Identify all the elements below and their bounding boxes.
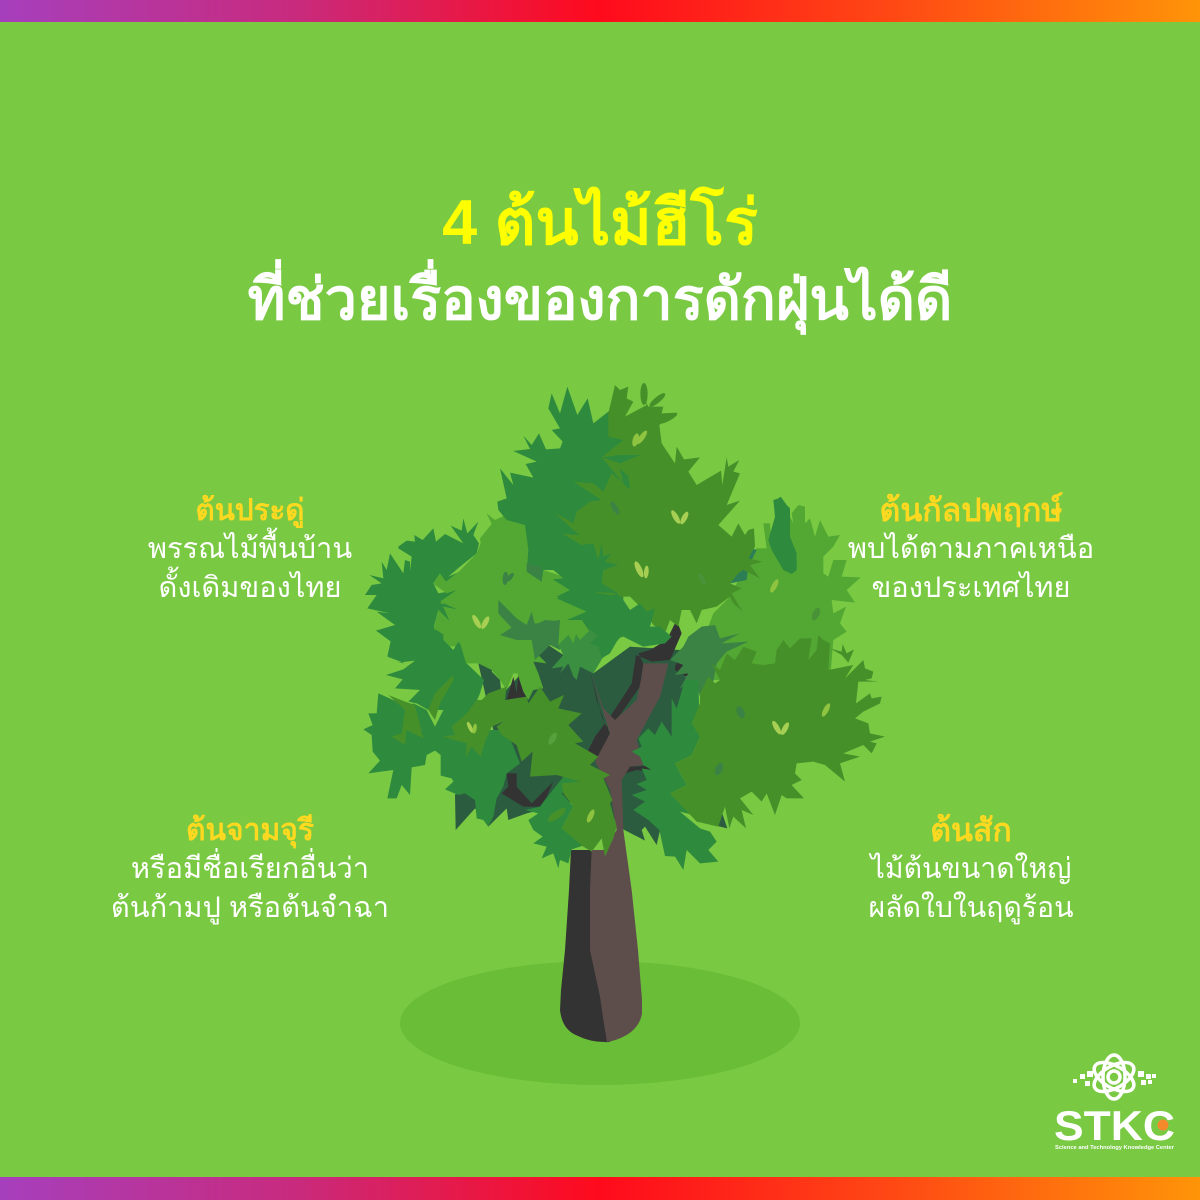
teal edge (730, 547, 757, 583)
bottom gradient bar (0, 1177, 1200, 1200)
foliage: lower left (363, 620, 625, 827)
label: ต้นสัก: ไม้ต้นขนาดใหญ่ (871, 853, 1071, 885)
foliage: centre bottom (443, 687, 617, 868)
right mid-green cluster (703, 505, 861, 680)
blue-green patch right (670, 625, 748, 700)
title line 1: 4 ต้นไม้ฮีโร่ (442, 188, 758, 258)
label: ต้นกัลปพฤกษ์: พบได้ตามภาคเหนือ (848, 533, 1094, 565)
blue-green patch lower (500, 620, 560, 660)
pale leaf pair (471, 614, 491, 630)
label: ต้นประดู่: พรรณไม้พื้นบ้าน (148, 533, 352, 565)
foliage: lower right (632, 625, 885, 870)
right dark blob (768, 497, 797, 574)
centre bright tuft (558, 620, 580, 645)
foliage: upper right (703, 497, 861, 680)
mid cluster lower (437, 630, 560, 700)
top dark cluster (497, 387, 623, 613)
label: ต้นจามจุรี (111, 814, 389, 924)
label: ต้นจามจุรี: ต้นจามจุรี (186, 814, 314, 847)
top olive cluster (555, 385, 763, 633)
label: ต้นประดู่: ต้นประดู่ (196, 494, 304, 527)
top gradient bar (0, 0, 1200, 22)
leaves right (713, 702, 832, 776)
left dark cluster lower (377, 630, 484, 717)
left dark cluster (365, 518, 479, 643)
trunk dark side (560, 850, 610, 1042)
icon: pixel squares (1073, 1071, 1156, 1086)
label: ต้นประดู่: ดั้งเดิมของไทย (159, 572, 341, 604)
label: ต้นสัก: ต้นสัก (930, 812, 1012, 848)
small top leaf sprigs (640, 383, 678, 425)
label: ต้นกัลปพฤกษ์: ต้นกัลปพฤกษ์ (880, 492, 1062, 528)
small leaf sprig (830, 644, 854, 663)
label: ต้นจามจุรี: หรือมีชื่อเรียกอื่นว่า (131, 853, 369, 885)
trunk brown side (590, 663, 668, 1042)
ground shadow (400, 961, 800, 1085)
faint leaves (697, 573, 822, 621)
teal shard (707, 807, 727, 828)
blue-green notch (527, 563, 542, 582)
wordmark: STKC (1054, 1102, 1175, 1149)
back foliage (455, 645, 690, 845)
small leaves upper left (471, 500, 621, 630)
blue-green patch (498, 600, 573, 643)
title line 2: ที่ช่วยเรื่องของการดักฝุ่นได้ดี (248, 268, 952, 332)
lower left dark cluster (363, 693, 520, 827)
small leaves lower right (713, 702, 832, 776)
centre dark tuft right (590, 632, 625, 658)
tagline: Science and Technology Knowledge Center (1055, 1145, 1175, 1151)
icon: atom (1089, 1055, 1139, 1099)
leaves lower left (466, 721, 596, 824)
olive arc and patches (388, 675, 453, 745)
label: ต้นประดู่ (148, 494, 352, 604)
small leaves upper right (631, 429, 822, 621)
right olive cluster (670, 635, 885, 828)
centre olive cluster (443, 687, 617, 857)
branches (502, 620, 707, 807)
label: ต้นจามจุรี: ต้นก้ามปู หรือต้นจำฉา (111, 892, 389, 924)
centre tuft (552, 630, 603, 680)
label: ต้นกัลปพฤกษ์: ของประเทศไทย (871, 572, 1071, 604)
left mid cluster (433, 513, 593, 647)
centre dark tuft over olive (557, 592, 672, 647)
dark leaves on olive (602, 455, 640, 463)
small leaves lower (466, 721, 596, 824)
lower right dark cluster (632, 680, 718, 870)
dark leaf pair (502, 500, 621, 585)
back foliage and branches (455, 620, 707, 845)
pale leaves (631, 429, 780, 594)
orange dot (1158, 1120, 1168, 1130)
bottom dark cluster (525, 777, 590, 868)
label: ต้นกัลปพฤกษ์ (848, 492, 1094, 604)
label: ต้นสัก: ผลัดใบในฤดูร้อน (869, 892, 1073, 924)
foliage: upper left (365, 383, 763, 647)
label: ต้นสัก (868, 812, 1073, 924)
